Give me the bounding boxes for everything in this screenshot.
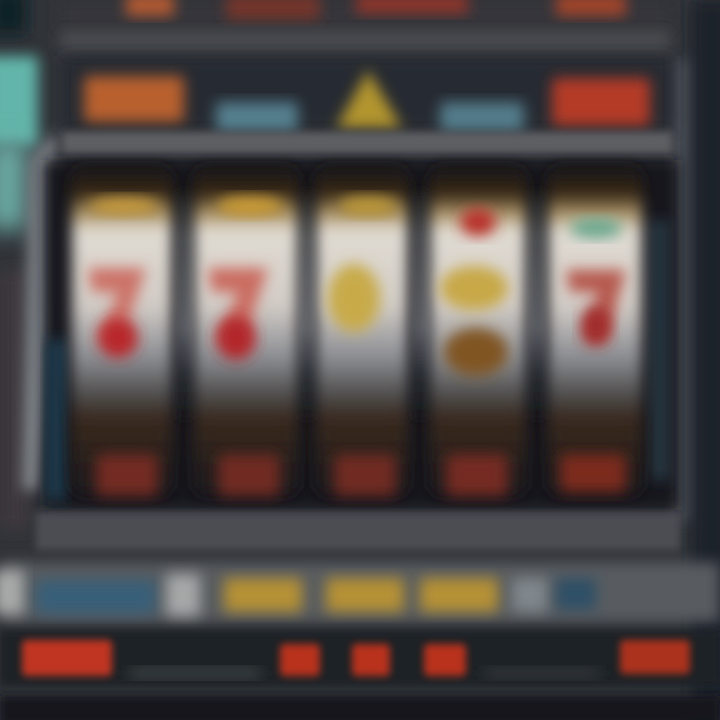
reel 4: [430, 166, 526, 496]
reel 2: [194, 166, 298, 496]
metal bar above reels: [62, 132, 672, 156]
left teal panel: [0, 0, 56, 490]
reel 5: [548, 166, 642, 496]
reel window: [44, 160, 678, 510]
lower metal bar: [36, 512, 680, 550]
reel 3: [316, 166, 408, 496]
reel 1: [72, 166, 172, 496]
upper paytable row: [62, 56, 672, 132]
top row of lights: [60, 0, 670, 52]
bottom buttons row: [0, 630, 720, 686]
button strip: [0, 562, 720, 622]
